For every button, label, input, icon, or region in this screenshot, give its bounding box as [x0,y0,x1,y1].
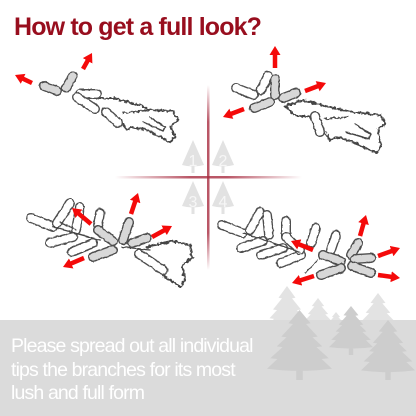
arrows [63,193,172,267]
panel: step 3 branch [31,193,192,287]
branch drawing [236,76,385,153]
instruction text: tips the branches for its most [11,359,236,381]
grey footer band [0,320,416,416]
title: How to get a full look? [14,13,261,41]
numbered tree markers [182,140,234,214]
instruction text: Please spread out all individual [11,335,253,357]
foreground tree group [267,306,415,380]
panel: step 2 branch [223,46,385,153]
marker 2: 2 [219,153,228,170]
branch drawing [44,76,178,142]
background pale trees [262,286,400,348]
quadrant divider [115,85,302,270]
arrows [15,53,92,83]
arrows [223,46,326,117]
instruction text: lush and full form [11,382,144,404]
arrows [291,215,400,283]
marker 3: 3 [189,194,198,211]
panel: step 1 branch [15,53,178,142]
marker 1: 1 [189,153,198,170]
branch drawing [222,212,371,275]
panel: step 4 branch [222,212,400,283]
instruction text [11,335,253,404]
branch drawing [31,203,192,287]
marker 4: 4 [219,194,228,211]
